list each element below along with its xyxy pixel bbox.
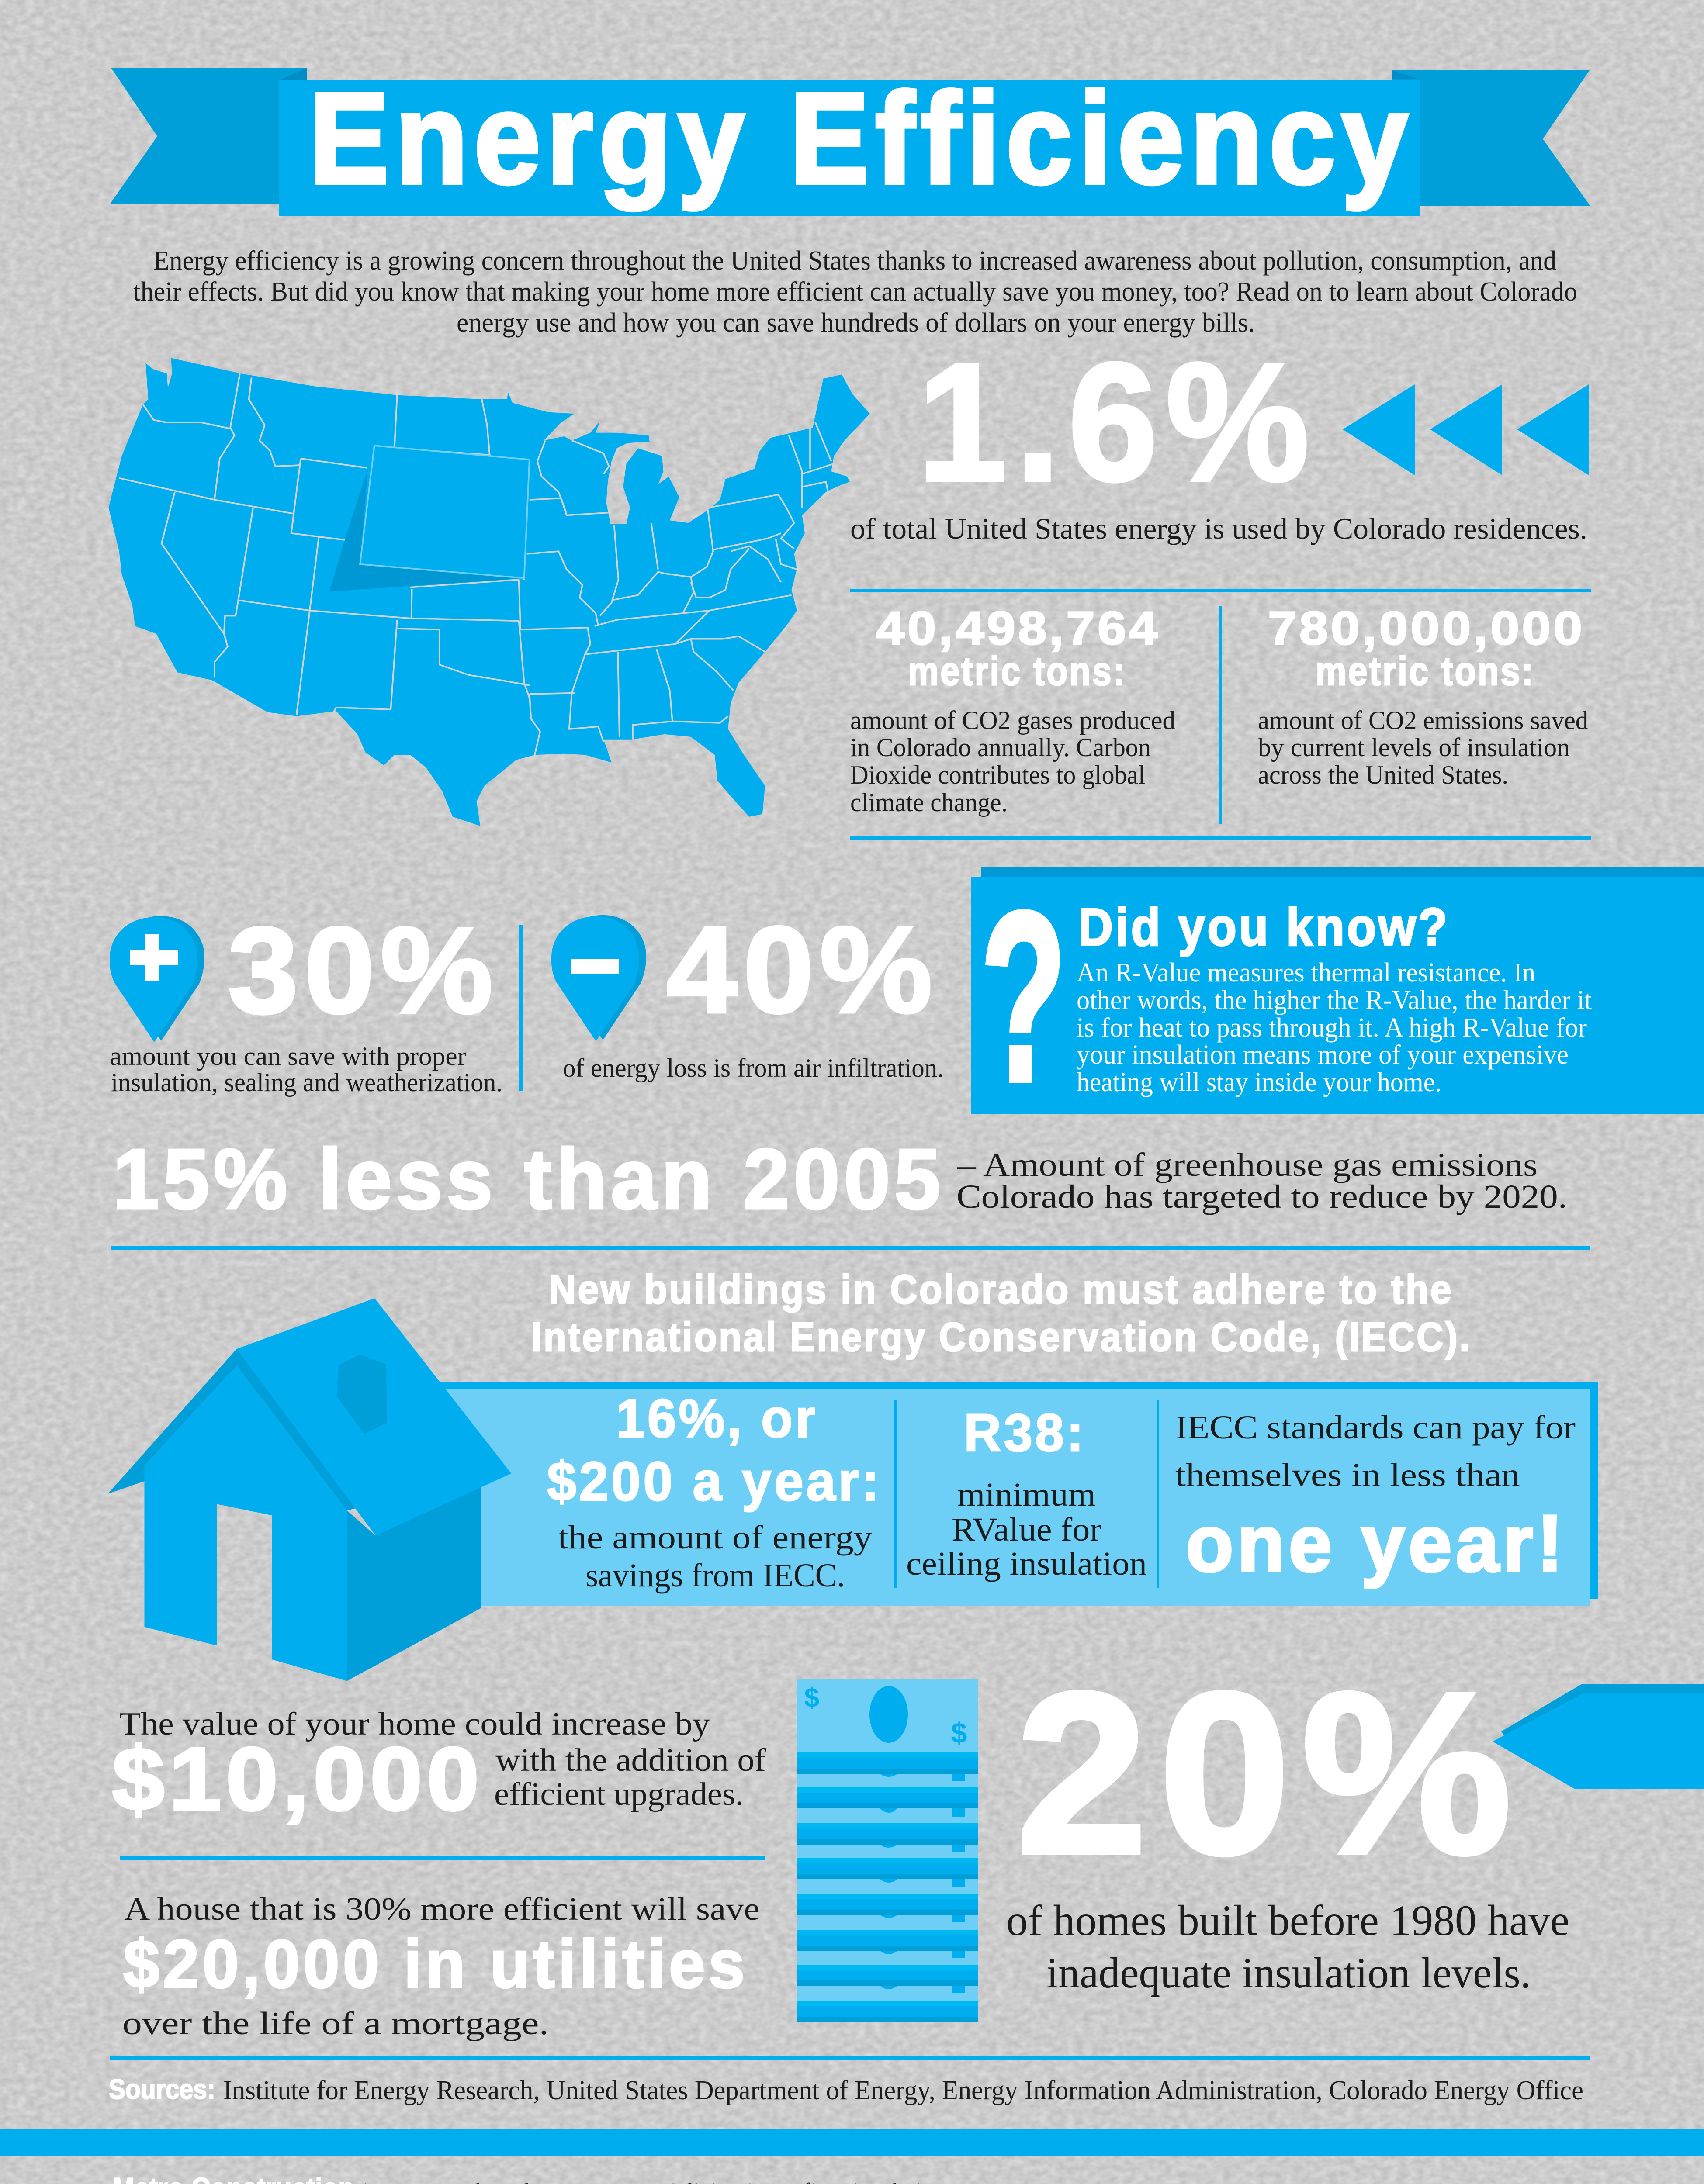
state borders xyxy=(119,373,834,755)
stat: 20 percent: 20% xyxy=(1016,1645,1523,1901)
left ribbon fold xyxy=(281,68,307,80)
company description xyxy=(113,2172,958,2184)
intro paragraph: their effects. But did you know that making your home more efficient can actually save you money, too? Read on to learn about Colorado xyxy=(133,277,1577,307)
icon: house xyxy=(108,1298,511,1681)
panel: IECC facts xyxy=(440,1382,1598,1606)
triple arrows xyxy=(1343,384,1589,475)
caption: 15 percent xyxy=(956,1147,1567,1215)
caption: 20 percent xyxy=(1006,1896,1569,1997)
fact: R38: R38: xyxy=(964,1403,1086,1462)
caption: 1.6 percent: of total United States energy is used by Colorado residences. xyxy=(850,512,1587,545)
fact: 16 percent or 200 dollars: the amount of energy xyxy=(558,1519,872,1556)
US map xyxy=(108,358,870,826)
panel heading: Did you know? xyxy=(1078,897,1450,957)
heading: IECC: International Energy Conservation Code, (IECC). xyxy=(531,1314,1472,1360)
stat: 40,498,764 metric tons: 40,498,764 xyxy=(876,601,1160,654)
heading: IECC: New buildings in Colorado must adhere to the xyxy=(549,1266,1453,1312)
title banner xyxy=(110,66,1590,216)
stat: 30 percent: 30% xyxy=(228,902,499,1039)
value: 10,000 dollars xyxy=(112,1706,766,1829)
house front wall xyxy=(144,1365,347,1681)
icon: money stack xyxy=(797,1679,978,2022)
caption: 15 percent: – Amount of greenhouse gas emissions xyxy=(957,1147,1538,1183)
caption: 20 percent: of homes built before 1980 have xyxy=(1006,1896,1569,1945)
intro paragraph: energy use and how you can save hundreds of dollars on your energy bills. xyxy=(457,308,1255,338)
column divider xyxy=(1157,1400,1159,1588)
rule xyxy=(120,1856,765,1860)
stat: 780,000,000 metric tons: 780,000,000 xyxy=(1268,601,1585,654)
stat: 40,498,764 metric tons: in Colorado annually. Carbon xyxy=(850,733,1151,762)
intro paragraph: Energy efficiency is a growing concern throughout the United States thanks to increased awareness about pollution, consumption, and xyxy=(153,246,1556,276)
divider xyxy=(1219,606,1222,824)
caption: 40 percent: of energy loss is from air infiltration. xyxy=(563,1054,944,1082)
panel text: An R-Value measures thermal resistance. In xyxy=(1077,958,1535,988)
top bill xyxy=(797,1679,978,2022)
bill dollar sign: $ xyxy=(951,1717,967,1749)
panel text: heating will stay inside your home. xyxy=(1077,1068,1441,1097)
bill oval xyxy=(869,1686,908,1743)
fact: R38: RValue for xyxy=(952,1511,1101,1548)
map outline xyxy=(108,358,870,826)
stat: 15 percent less than 2005: 15% less than 2005 xyxy=(113,1131,945,1227)
panel text xyxy=(1077,958,1592,1097)
house chimney xyxy=(336,1355,387,1434)
panel body xyxy=(971,877,1704,1114)
rule xyxy=(850,836,1591,840)
fact: 16 percent or 200 dollars xyxy=(547,1389,882,1594)
Colorado highlighted xyxy=(360,446,530,578)
stat: 40,498,764 metric tons: amount of CO2 gases produced xyxy=(850,706,1175,735)
panel fill xyxy=(440,1389,1590,1606)
intro paragraph xyxy=(133,246,1577,338)
stat: 780,000,000 metric tons xyxy=(1258,601,1588,789)
rule xyxy=(850,589,1591,592)
fact: R38 xyxy=(906,1403,1147,1582)
panel text: your insulation means more of your expensive xyxy=(1077,1040,1569,1070)
icon: minus pin xyxy=(551,915,646,1041)
value: 10,000 dollars: The value of your home could increase by xyxy=(119,1706,710,1742)
stat: 780,000,000 metric tons: across the United States. xyxy=(1258,760,1508,789)
icon: plus pin xyxy=(110,916,204,1042)
value: 10,000 dollars: $10,000 xyxy=(112,1729,484,1829)
icon: question mark: ? xyxy=(981,862,1066,1131)
bill dollar sign: $ xyxy=(804,1683,819,1713)
Colorado shadow xyxy=(329,469,519,591)
fact: one year: themselves in less than xyxy=(1175,1457,1520,1493)
stacked bill edges xyxy=(797,1752,978,2022)
house side wall xyxy=(347,1487,481,1681)
heading: IECC xyxy=(531,1266,1472,1360)
stat: 780,000,000 metric tons: metric tons: xyxy=(1316,649,1535,694)
value: 20,000 dollars: over the life of a mortgage. xyxy=(122,2006,549,2042)
fact: R38: minimum xyxy=(957,1476,1096,1513)
banner panel xyxy=(279,80,1420,216)
rule xyxy=(110,2056,1590,2060)
panel text: other words, the higher the R-Value, the harder it xyxy=(1077,985,1592,1015)
caption: 20 percent: inadequate insulation levels. xyxy=(1046,1949,1531,1997)
value: 10,000 dollars: with the addition of xyxy=(495,1742,766,1778)
stat: 40,498,764 metric tons xyxy=(850,601,1175,817)
caption: 30 percent: insulation, sealing and weatherization. xyxy=(111,1068,502,1097)
fact: one year xyxy=(1175,1409,1576,1588)
sources: Sources: xyxy=(109,2073,215,2105)
stat: 40 percent: 40% xyxy=(667,902,939,1038)
fact: R38: ceiling insulation xyxy=(906,1545,1147,1582)
house eave xyxy=(108,1349,363,1510)
panel text: is for heat to pass through it. A high R-Value for xyxy=(1077,1013,1587,1043)
arrow pointer xyxy=(1493,1684,1704,1789)
footer bar xyxy=(0,2129,1704,2156)
stat: 780,000,000 metric tons: by current levels of insulation xyxy=(1258,733,1570,762)
rule xyxy=(111,1246,1590,1250)
caption: 30 percent xyxy=(110,1042,502,1097)
fact: 16 percent or 200 dollars: 16%, or xyxy=(616,1389,818,1449)
house roof xyxy=(237,1298,511,1535)
caption: 15 percent: Colorado has targeted to reduce by 2020. xyxy=(956,1178,1567,1215)
sources: Institute for Energy Research, United States Department of Energy, Energy Information Administration, Colorado Energy Office xyxy=(223,2076,1583,2105)
value: 20,000 dollars: $20,000 in utilities xyxy=(123,1926,748,2002)
peeking oval and dollar marks xyxy=(880,1774,965,1993)
fact: 16 percent or 200 dollars: $200 a year: xyxy=(547,1451,882,1512)
right ribbon fold xyxy=(1392,70,1420,79)
value: 20,000 dollars: A house that is 30% more efficient will save xyxy=(124,1891,760,1927)
fact: 16 percent or 200 dollars: savings from IECC. xyxy=(585,1557,845,1594)
stat: 780,000,000 metric tons: amount of CO2 emissions saved xyxy=(1258,706,1588,735)
divider xyxy=(519,925,523,1091)
stat: 1.6 percent: 1.6% xyxy=(918,328,1317,516)
value: 10,000 dollars: efficient upgrades. xyxy=(494,1776,744,1812)
panel: did you know xyxy=(971,862,1704,1131)
column divider xyxy=(894,1400,897,1588)
title: Energy Efficiency xyxy=(309,66,1414,211)
left ribbon xyxy=(110,68,307,204)
panel top shade xyxy=(981,867,1704,878)
stat: 40,498,764 metric tons: metric tons: xyxy=(908,649,1126,694)
right ribbon xyxy=(1392,70,1590,206)
panel border xyxy=(440,1382,1598,1599)
caption: 30 percent: amount you can save with proper xyxy=(110,1042,466,1071)
stat: 40,498,764 metric tons: Dioxide contributes to global xyxy=(850,760,1145,789)
value: 20,000 dollars xyxy=(122,1891,760,2042)
fact: one year: IECC standards can pay for xyxy=(1175,1409,1576,1446)
fact: one year: one year! xyxy=(1186,1498,1567,1588)
stat: 40,498,764 metric tons: climate change. xyxy=(850,788,1008,817)
